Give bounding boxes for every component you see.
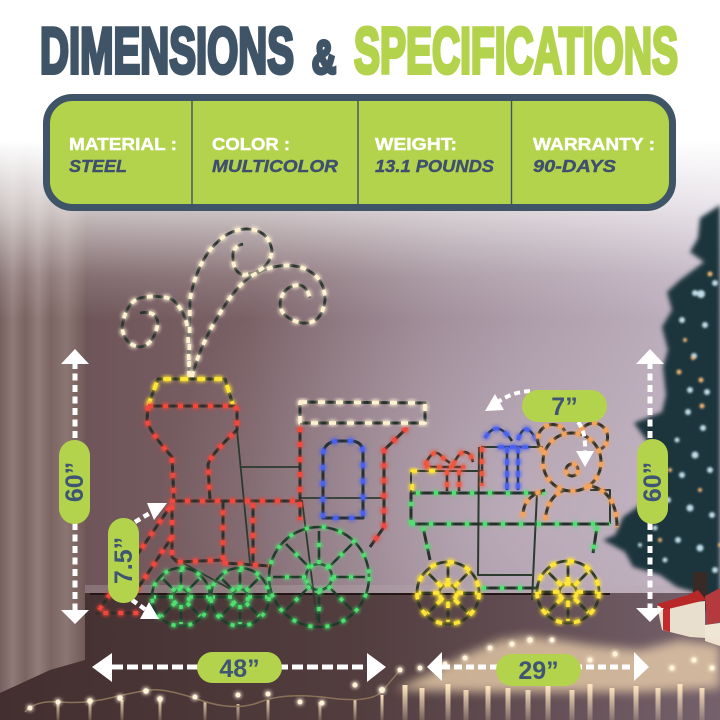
spec: warranty bbox=[533, 134, 655, 176]
floor fairy lights and reflections bbox=[25, 636, 720, 720]
carriage body in green lights bbox=[411, 493, 610, 588]
gift boxes bbox=[657, 588, 720, 646]
spec: material: MATERIAL : bbox=[69, 134, 177, 154]
spec: color bbox=[212, 134, 338, 176]
locomotive green wheels bbox=[152, 527, 369, 627]
light-up carriage with gifts and teddy bear bbox=[411, 423, 617, 624]
dimension: right height 60 inches: 60” bbox=[639, 462, 667, 502]
chimney top in yellow lights bbox=[148, 379, 233, 406]
title bbox=[40, 14, 678, 87]
teddy bear in orange lights bbox=[523, 423, 617, 527]
dimension: left height 60 inches: 60” bbox=[61, 462, 89, 502]
large gift in blue lights bbox=[485, 429, 537, 490]
spec: material: STEEL bbox=[69, 156, 127, 176]
carriage yellow wheels bbox=[417, 561, 599, 624]
carriage wire frame bbox=[411, 447, 610, 600]
dimension: depth 7.5 inches: 7.5” bbox=[110, 537, 138, 584]
tree fairy lights bbox=[638, 272, 720, 573]
specifications panel bbox=[46, 98, 672, 208]
dimension: depth 7.5 inches bbox=[108, 503, 167, 619]
dimension: depth 7 inches: 7” bbox=[551, 393, 578, 421]
title: & bbox=[312, 31, 336, 83]
boiler and cowcatcher in red lights bbox=[97, 406, 407, 613]
spec: weight bbox=[375, 134, 494, 176]
spec: color: COLOR : bbox=[212, 134, 290, 154]
smoke plume in warm white lights bbox=[122, 229, 325, 377]
dimension: width 29 inches: 29” bbox=[518, 657, 559, 685]
spec: material bbox=[69, 134, 177, 176]
spec: warranty: WARRANTY : bbox=[533, 134, 655, 154]
spec: weight: 13.1 POUNDS bbox=[375, 156, 494, 176]
cab window in blue lights bbox=[323, 441, 363, 518]
small gift in red lights bbox=[425, 447, 482, 491]
cab roof in white lights bbox=[300, 402, 425, 423]
yellow lid accent of small gift bbox=[412, 471, 446, 490]
spec: weight: WEIGHT: bbox=[375, 134, 457, 154]
dimension: right height 60 inches bbox=[636, 349, 668, 622]
dimension: left height 60 inches bbox=[59, 349, 90, 624]
dimension: depth 7 inches bbox=[485, 390, 607, 467]
title: DIMENSIONS bbox=[40, 14, 294, 87]
christmas tree bbox=[603, 205, 720, 610]
spec: warranty: 90-DAYS bbox=[533, 156, 616, 176]
dimension: width 48 inches: 48” bbox=[219, 655, 260, 683]
spec: color: MULTICOLOR bbox=[212, 156, 338, 176]
dimension: width 29 inches bbox=[427, 652, 649, 686]
dimension: width 48 inches bbox=[92, 652, 386, 683]
light-up locomotive bbox=[97, 229, 425, 627]
locomotive wire frame bbox=[172, 430, 383, 620]
